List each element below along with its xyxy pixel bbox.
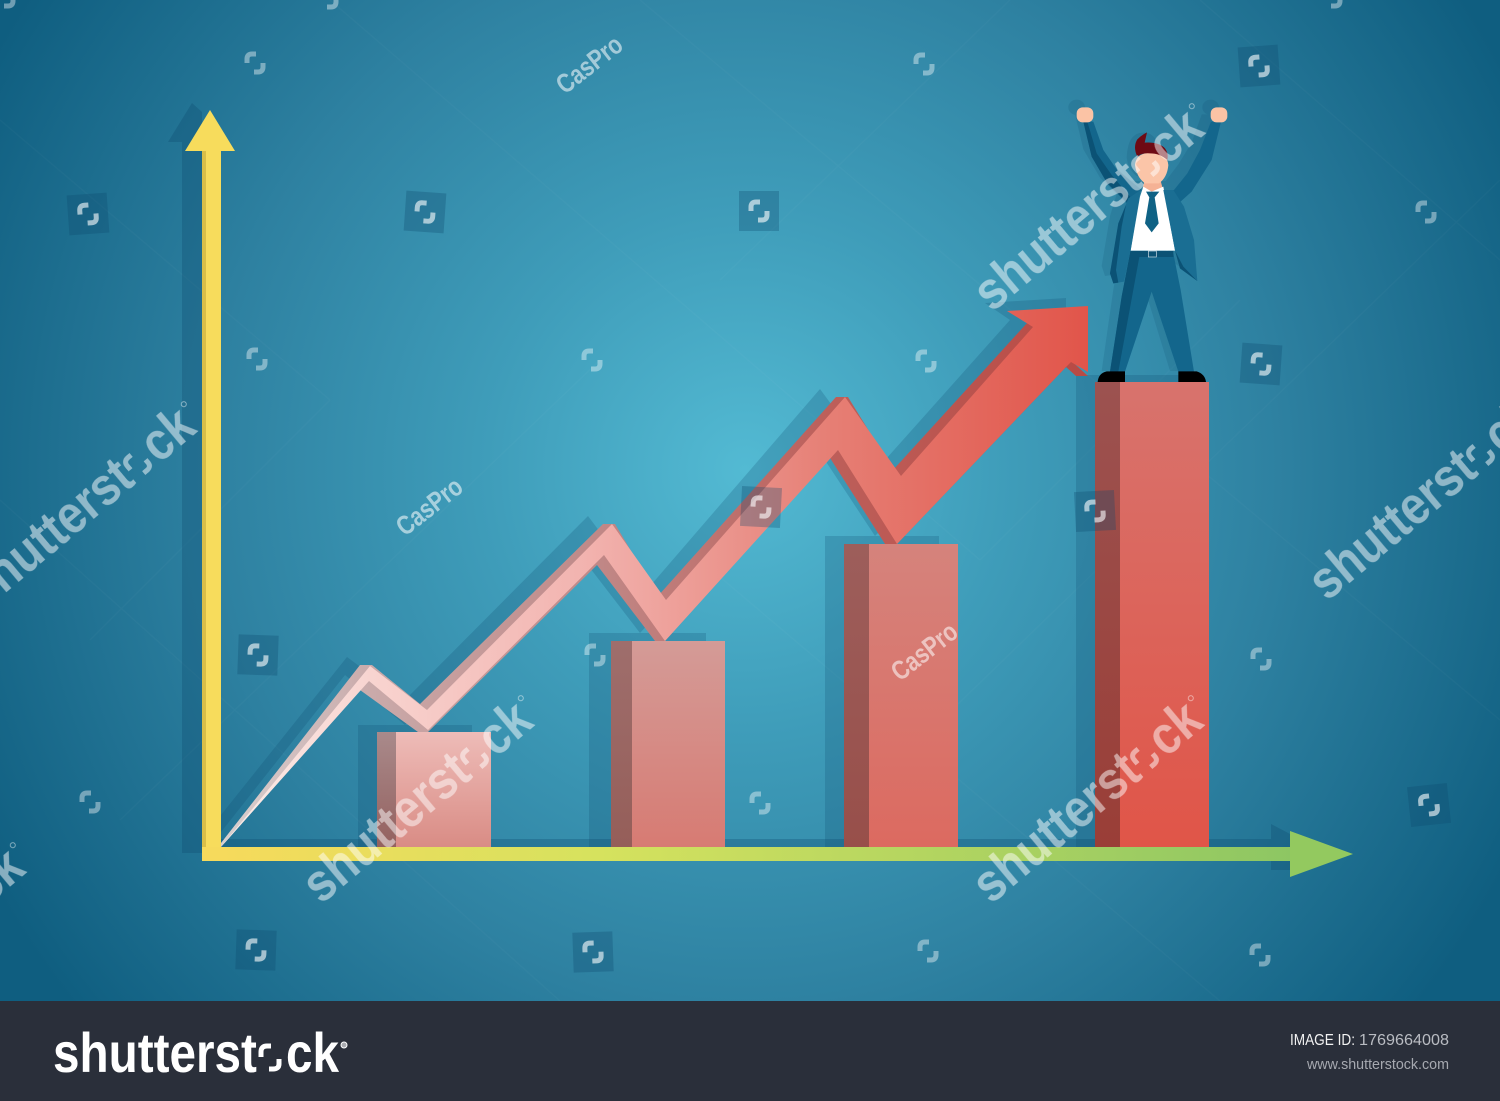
- hair: [1135, 132, 1168, 160]
- trouser shading: [1110, 253, 1140, 372]
- bar 2: [611, 641, 725, 847]
- footer logo: shutterstock: [53, 1021, 340, 1084]
- left jacket shading: [1110, 205, 1126, 283]
- necktie: [1145, 192, 1159, 232]
- trend arrow shadow: [221, 298, 1066, 832]
- belt: [1130, 251, 1173, 257]
- watermark: square icons: [67, 45, 1451, 973]
- trousers: [1110, 253, 1194, 372]
- right fist: [1211, 107, 1227, 122]
- arrow dark edge: [221, 322, 1088, 847]
- right arm: [1162, 122, 1221, 207]
- left arm shading: [1083, 122, 1130, 203]
- CasPro top: CasPro: [550, 29, 629, 100]
- watermark over bar 4: shutterstock: [960, 688, 1214, 914]
- watermark: CasPro labels: [390, 29, 964, 687]
- footer bar: [0, 1001, 1500, 1101]
- businessman: [1068, 100, 1227, 382]
- image id: 1769664008: [1359, 1032, 1449, 1049]
- left fist: [1077, 107, 1093, 122]
- bar 1: [377, 732, 491, 847]
- image id: [1290, 1032, 1449, 1049]
- image id: IMAGE ID:: [1290, 1032, 1355, 1049]
- left jacket panel: [1110, 190, 1141, 283]
- rising trend arrow: [221, 306, 1088, 847]
- right jacket panel: [1163, 190, 1197, 281]
- neck: [1143, 178, 1163, 193]
- left arm: [1083, 122, 1142, 207]
- left shoe: [1098, 371, 1125, 382]
- watermark over businessman: shutterstock: [961, 96, 1215, 322]
- bar 3: [844, 544, 958, 847]
- right jacket shading: [1175, 251, 1197, 281]
- horizontal axis arrow: [202, 831, 1353, 877]
- right shoe: [1178, 371, 1206, 382]
- axis shadows: [168, 103, 1290, 870]
- figure shadow: [1068, 100, 1219, 371]
- face: [1135, 153, 1168, 183]
- shirt: [1131, 187, 1175, 251]
- CasPro centre: CasPro: [390, 471, 469, 542]
- bar shadows: [358, 375, 1190, 847]
- vertical axis arrow: [185, 110, 235, 861]
- watermark bottom-left corner: [0, 830, 42, 1061]
- CasPro bar 3: CasPro: [885, 616, 964, 687]
- arrow face: [221, 306, 1088, 847]
- website: www.shutterstock.com: [1306, 1057, 1449, 1073]
- bar 4: [1095, 382, 1209, 847]
- watermark over bar 1: shutterstock: [290, 688, 544, 914]
